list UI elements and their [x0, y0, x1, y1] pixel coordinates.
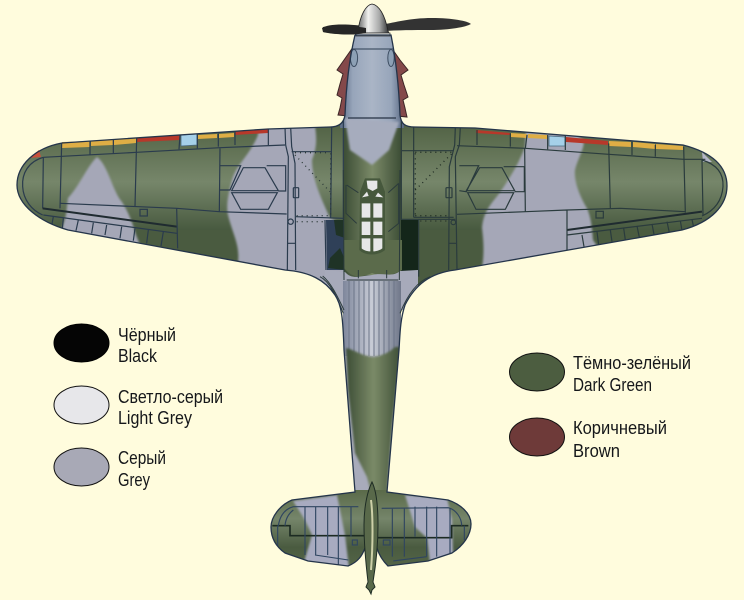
tailplane grey patch right — [405, 495, 453, 563]
left wing panel lines — [23, 120, 343, 270]
tail fin — [364, 482, 378, 594]
legend: grey: Серый — [118, 448, 166, 468]
left tailplane lines — [272, 507, 365, 565]
legend: grey — [54, 448, 166, 490]
propeller spinner — [323, 4, 390, 36]
legend: brown — [510, 418, 667, 461]
panel lines clipped to aircraft — [23, 120, 723, 565]
legend: black — [54, 324, 176, 366]
legend: dark green: Тёмно-зелёный — [573, 353, 691, 373]
legend: black: Black — [118, 346, 158, 366]
green base — [18, 125, 726, 230]
grey under fuselage and wing root — [337, 270, 418, 310]
fuselage green — [344, 125, 401, 275]
grey patch: right wing — [482, 126, 600, 268]
wing tip grey — [702, 152, 712, 162]
left wing red and yellow leading edge — [29, 129, 268, 158]
right tailplane lines — [375, 507, 468, 561]
tailplane grey patch left — [293, 495, 349, 568]
legend: brown: Brown — [573, 441, 620, 461]
canopy glass — [362, 181, 383, 251]
grey patch: left wing outer — [60, 157, 142, 250]
dark wheel-well shadow right — [401, 220, 418, 271]
ribbed belly — [343, 281, 401, 363]
fuselage seam lines — [320, 170, 430, 313]
legend: light grey: Light Grey — [118, 408, 192, 428]
rear fuselage grey — [345, 356, 395, 490]
legend: black: Чёрный — [118, 325, 176, 345]
legend: dark green: Dark Green — [573, 375, 652, 395]
canopy frame — [359, 178, 385, 254]
canopy and fuselage detail — [320, 170, 430, 313]
propeller — [322, 18, 471, 35]
exhausts — [337, 50, 408, 117]
cowling detail — [348, 49, 396, 118]
rear fuselage green — [346, 347, 401, 496]
right wing panel lines — [401, 120, 723, 277]
legend: grey: Grey — [118, 470, 150, 490]
legend: light grey: Светло-серый — [118, 387, 223, 407]
legend: dark green — [510, 353, 691, 395]
legend: brown: Коричневый — [573, 418, 667, 438]
dark wheel-well shadow left — [326, 220, 344, 270]
right wing red and yellow leading edge — [476, 130, 683, 150]
grey patch: left wing inner — [226, 128, 344, 283]
grey nose — [340, 34, 404, 128]
legend: light grey — [54, 386, 223, 428]
tailplane green base — [272, 490, 470, 566]
